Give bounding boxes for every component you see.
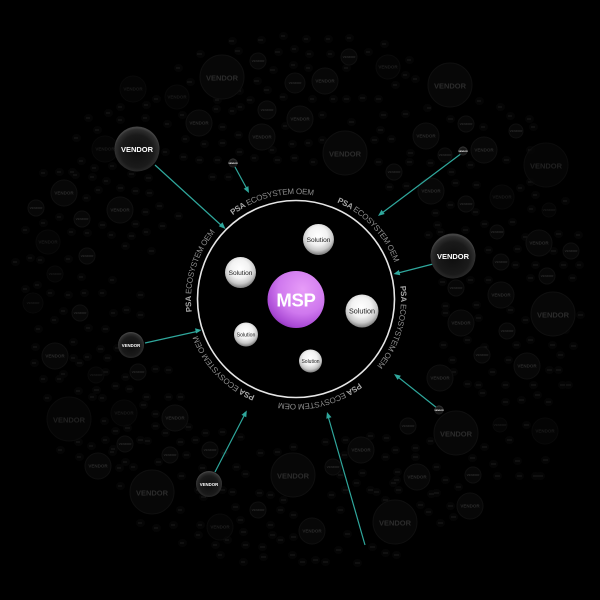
vendor node (250, 53, 266, 69)
vendor node: VENDOR (327, 465, 340, 469)
vendor node (111, 400, 137, 426)
vendor node: VENDOR (421, 188, 441, 194)
vendor node (458, 196, 474, 212)
vendor: tiny bottom-right (434, 406, 444, 414)
vendor node (458, 116, 474, 132)
vendor node (471, 137, 497, 163)
vendor node (92, 136, 118, 162)
vendor node (74, 211, 90, 227)
vendor node: VENDOR (290, 116, 310, 122)
vendor node (186, 110, 212, 136)
highlighted vendors (114, 126, 476, 497)
vendor node (107, 197, 133, 223)
vendor node: VENDOR (491, 230, 504, 234)
vendor node (490, 185, 514, 209)
vendor: tiny top (228, 158, 238, 168)
vendor node: VENDOR (74, 311, 87, 315)
vendor node: VENDOR (90, 373, 103, 377)
vendor: left medium (118, 332, 144, 358)
vendor node: VENDOR (450, 286, 463, 290)
vendor: right large: VENDOR (437, 252, 470, 261)
vendor node (348, 437, 374, 463)
vendor node (47, 397, 91, 441)
vendor node (42, 343, 68, 369)
ring (198, 200, 394, 398)
vendor node: VENDOR (440, 430, 473, 438)
vendor node: VENDOR (38, 240, 58, 244)
vendor: left medium: VENDOR (122, 343, 141, 348)
vendor node: VENDOR (27, 301, 40, 305)
arrow: small top vendor to ring (235, 167, 249, 193)
vendor node: VENDOR (517, 364, 537, 368)
vendor node: VENDOR (495, 260, 508, 264)
vendor node: VENDOR (460, 504, 480, 508)
arc label 6: PSA ECOSYSTEM OEM (186, 229, 215, 312)
vendor node: VENDOR (510, 129, 523, 133)
vendor node: VENDOR (474, 148, 494, 152)
vendor node (130, 364, 146, 380)
vendor node (130, 470, 174, 514)
vendor node (493, 254, 509, 270)
vendor: tiny bottom-right: VENDOR (434, 410, 444, 412)
vendor node (47, 266, 63, 282)
vendor node: VENDOR (388, 170, 401, 174)
solution: top (303, 224, 334, 255)
vendor node: VENDOR (494, 423, 507, 427)
vendor node: VENDOR (351, 448, 371, 452)
vendor node (165, 85, 189, 109)
vendor node (250, 502, 266, 518)
vendor node (434, 411, 478, 455)
vendor node (563, 243, 579, 259)
vendor node: VENDOR (53, 416, 86, 424)
solution: top: Solution (307, 237, 331, 244)
vendor node (448, 310, 474, 336)
vendor node: VENDOR (434, 82, 467, 90)
solution: right: Solution (349, 306, 375, 316)
vendor node: VENDOR (167, 94, 187, 100)
vendor node (418, 178, 444, 204)
vendor node: VENDOR (210, 524, 230, 530)
vendor node (404, 464, 430, 490)
vendor node (474, 347, 490, 363)
vendor node: VENDOR (30, 206, 43, 210)
vendor node (488, 282, 514, 308)
vendor node: VENDOR (277, 472, 310, 480)
vendor node (427, 365, 453, 391)
vendor node (509, 124, 523, 138)
vendor node (457, 493, 483, 519)
vendor node: VENDOR (81, 254, 94, 258)
vendor node: VENDOR (76, 217, 89, 221)
vendor node: VENDOR (49, 272, 62, 276)
vendor node (524, 143, 568, 187)
solutions (225, 224, 378, 372)
vendor node: VENDOR (261, 108, 274, 112)
vendor node: VENDOR (165, 416, 185, 420)
vendor node: VENDOR (315, 78, 335, 84)
vendor node (539, 268, 555, 284)
vendor node (88, 367, 104, 383)
vendor node: VENDOR (430, 376, 450, 380)
vendor node (117, 436, 133, 452)
vendor node: VENDOR (416, 134, 436, 138)
vendor node: VENDOR (491, 292, 511, 298)
vendor node: VENDOR (467, 473, 480, 477)
arrow: bottom-left vendor to ring (215, 410, 247, 472)
vendor node (312, 68, 338, 94)
dim vendor nodes (23, 49, 579, 544)
vendor: right large (430, 234, 476, 278)
vendor: top-left large (114, 126, 160, 172)
vendor node (85, 453, 111, 479)
solution: lower-left (234, 322, 258, 346)
vendor node (448, 280, 464, 296)
solution: bottom (299, 350, 322, 372)
vendor: bottom-left medium: VENDOR (200, 482, 219, 487)
vendor: top-left large: VENDOR (121, 145, 154, 154)
vendor node (23, 293, 43, 313)
arc label 4: PSA ECOSYSTEM OEM (278, 383, 362, 410)
vendor node (200, 55, 244, 99)
vendor node (386, 164, 402, 180)
vendor node (499, 323, 515, 339)
vendor node: VENDOR (88, 464, 108, 468)
vendor node (287, 106, 313, 132)
arrow: top-left vendor to ring (155, 165, 226, 229)
vendor node (299, 518, 325, 544)
solution: left: Solution (229, 270, 253, 277)
vendor node (341, 49, 357, 65)
vendor node (465, 467, 481, 483)
solution: left (225, 257, 256, 288)
vendor node: VENDOR (460, 122, 473, 126)
vendor node: VENDOR (123, 86, 143, 92)
arrow: bottom vendor to ring (326, 412, 365, 545)
arc label 3: PSA ECOSYSTEM OEM (377, 286, 406, 369)
vendor node: VENDOR (206, 74, 239, 82)
vendor node: VENDOR (379, 518, 412, 528)
vendor node: VENDOR (110, 208, 130, 212)
vendor node (490, 225, 504, 239)
arc label 1: PSA ECOSYSTEM OEM (230, 188, 314, 215)
vendor node: VENDOR (451, 320, 471, 326)
vendor node (428, 63, 472, 107)
vendor node: VENDOR (529, 240, 549, 246)
vendor node: VENDOR (439, 153, 452, 157)
vendor node: VENDOR (537, 310, 570, 320)
vendor node: VENDOR (343, 55, 356, 59)
vendor node: VENDOR (460, 202, 473, 206)
vendor node: VENDOR (252, 508, 265, 512)
vendor node: VENDOR (302, 528, 322, 534)
vendor node (271, 453, 315, 497)
connector arrows (145, 153, 462, 545)
vendor node (532, 418, 558, 444)
vendor node (526, 230, 552, 256)
vendor node: VENDOR (492, 194, 512, 200)
ring labels: PSA ecosystem OEM (186, 188, 406, 410)
vendor: tiny top: VENDOR (228, 163, 238, 165)
vendor node (51, 180, 77, 206)
vendor node: VENDOR (501, 329, 514, 333)
solution: lower-left: Solution (237, 332, 255, 338)
vendor node (120, 76, 146, 102)
vendor node (162, 405, 188, 431)
vendor node (373, 500, 417, 544)
vendor node: VENDOR (407, 474, 427, 480)
vendor node: VENDOR (54, 190, 74, 196)
vendor node (72, 305, 88, 321)
vendor node: VENDOR (136, 488, 169, 498)
arrow: left vendor to ring (145, 328, 202, 343)
vendor node: VENDOR (402, 424, 415, 428)
arrow: bottom-right small vendor to ring (394, 374, 437, 408)
vendor node (258, 101, 276, 119)
vendor node (438, 148, 452, 162)
solution: right (346, 294, 378, 328)
vendor node: VENDOR (95, 146, 115, 152)
vendor node (323, 131, 367, 175)
vendor node: VENDOR (164, 453, 177, 457)
vendor node (79, 248, 95, 264)
vendor node: VENDOR (565, 249, 578, 253)
vendor node (493, 418, 507, 432)
vendor: tiny top-right: VENDOR (458, 151, 468, 153)
vendor node (249, 124, 275, 150)
vendor node (325, 459, 341, 475)
vendor node (376, 55, 400, 79)
vendor node (531, 292, 575, 336)
arrow: right vendor to ring (394, 264, 433, 275)
arrow: top-right vendor to ring (378, 153, 462, 216)
arc label 5: PSA ECOSYSTEM OEM (192, 336, 254, 400)
vendor node (400, 418, 416, 434)
vendor node: VENDOR (543, 208, 556, 212)
vendor node: VENDOR (204, 448, 217, 452)
vendor node (36, 230, 60, 254)
vendor node (28, 200, 44, 216)
vendor node: VENDOR (476, 353, 489, 357)
arc label 2: PSA ECOSYSTEM OEM (338, 198, 400, 262)
vendor node: VENDOR (329, 150, 362, 158)
solution: bottom: Solution (301, 359, 320, 365)
vendor node (514, 353, 540, 379)
vendor node (162, 447, 178, 463)
vendor node (413, 123, 439, 149)
vendor node (202, 442, 218, 458)
vendor node: VENDOR (289, 81, 302, 85)
MSP sphere (268, 271, 324, 328)
vendor node: VENDOR (45, 354, 65, 358)
vendor node: VENDOR (541, 274, 554, 278)
vendor: tiny top-right (458, 146, 468, 156)
MSP sphere: MSP (276, 290, 316, 310)
vendor node: VENDOR (189, 120, 209, 126)
vendor node (207, 514, 233, 540)
vendor node: VENDOR (114, 410, 134, 416)
vendor node: VENDOR (119, 442, 132, 446)
vendor: bottom-left medium (196, 471, 222, 497)
vendor node (542, 203, 556, 217)
vendor node: VENDOR (252, 134, 272, 140)
vendor node: VENDOR (252, 59, 265, 63)
vendor node: VENDOR (132, 370, 145, 374)
vendor node (285, 73, 305, 93)
vendor node: VENDOR (530, 162, 563, 170)
vendor node: VENDOR (378, 64, 398, 70)
vendor node: VENDOR (535, 428, 555, 434)
